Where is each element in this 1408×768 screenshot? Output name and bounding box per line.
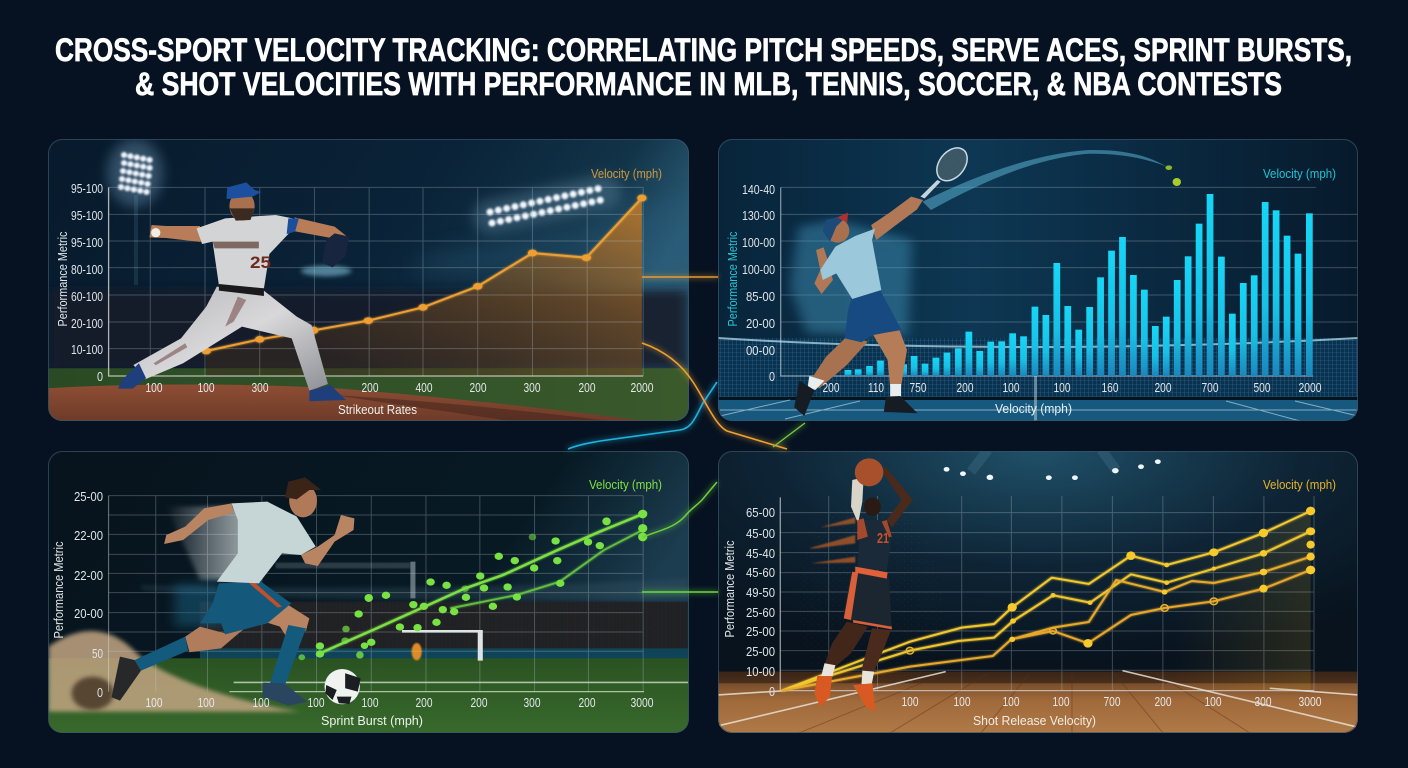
- x axis labels: 200: [1154, 380, 1172, 395]
- x axis labels: 100: [1052, 694, 1070, 709]
- panel: NBA shot release velocity: [718, 450, 1358, 735]
- x axis title: Shot Release Velocity): [973, 713, 1096, 728]
- x axis title: Sprint Burst (mph): [321, 713, 423, 728]
- y axis labels: 65-00: [746, 505, 775, 520]
- y axis title: Performance Metric: [51, 541, 66, 638]
- y axis labels: 25-60: [746, 605, 775, 620]
- x axis labels: [902, 697, 1322, 706]
- x axis labels: 100: [198, 380, 214, 395]
- arrow: green soccer-to-basketball link: [642, 591, 718, 593]
- y axis labels: 50: [92, 646, 103, 661]
- y axis title: Performance Metric: [55, 231, 70, 326]
- y axis labels: 20-00: [74, 606, 103, 621]
- panel border: NBA: [718, 452, 1358, 732]
- legend label: Velocity (mph): [589, 477, 662, 492]
- arrow: orange pitch-to-basketball link: [642, 343, 787, 449]
- panel: tennis serve velocity: [718, 139, 1358, 421]
- x axis labels: 100: [954, 694, 970, 709]
- x axis labels: 200: [578, 695, 596, 710]
- x axis labels: 100: [902, 694, 918, 709]
- jersey number: 21: [877, 530, 889, 547]
- y axis labels: [746, 505, 775, 699]
- y axis labels: 49-50: [746, 585, 775, 600]
- y axis labels: 95-100: [71, 235, 103, 250]
- y axis labels: 45-00: [746, 526, 775, 541]
- x axis labels: 300: [524, 380, 540, 395]
- x axis labels: 3000: [1298, 694, 1322, 709]
- y axis labels: 25-00: [74, 489, 103, 504]
- arena floor and lights: [718, 450, 1358, 735]
- x axis labels: 200: [470, 380, 486, 395]
- x axis labels: 3000: [630, 695, 654, 710]
- x axis labels: [146, 698, 654, 707]
- y axis labels: 130-00: [742, 208, 775, 223]
- scatter chart: sprint burst: [109, 496, 647, 692]
- y axis labels: 60-100: [71, 289, 103, 304]
- title: [55, 32, 1352, 102]
- x axis labels: 100: [1002, 694, 1020, 709]
- icon: floodlights: [107, 139, 606, 285]
- x axis labels: 700: [1202, 380, 1218, 395]
- x axis labels: 300: [1254, 694, 1272, 709]
- x axis labels: 750: [910, 380, 926, 395]
- y axis labels: 25-00: [746, 624, 775, 639]
- x axis labels: 200: [1154, 694, 1172, 709]
- y axis labels: 95-100: [71, 208, 103, 223]
- x axis labels: 500: [1254, 380, 1270, 395]
- y axis labels: 85-00: [746, 289, 775, 304]
- connector arrows between panels: [568, 277, 805, 592]
- x axis title: Strikeout Rates: [338, 402, 417, 417]
- x axis labels: 300: [524, 695, 540, 710]
- x axis labels: 100: [146, 695, 162, 710]
- x axis labels: 200: [470, 695, 488, 710]
- y axis labels: 0: [97, 685, 103, 700]
- illustration: basketball player shooting: [798, 458, 941, 713]
- x axis labels: [823, 383, 1322, 392]
- illustration: baseball pitcher: [118, 182, 349, 401]
- panel: soccer sprint bursts: [48, 451, 689, 735]
- y axis labels: 10-100: [71, 342, 103, 357]
- illustration: soccer player sprinting: [112, 477, 361, 706]
- y axis labels: 140-40: [742, 182, 775, 197]
- y axis labels: 20-00: [746, 316, 775, 331]
- legend label: Velocity (mph): [591, 166, 662, 181]
- y axis labels: 20-100: [71, 316, 103, 331]
- y axis labels: 22-00: [74, 568, 103, 583]
- y axis labels: 0: [97, 369, 103, 384]
- x axis labels: 100: [362, 695, 378, 710]
- arrow: orange pitch-to-tennis link: [642, 276, 718, 278]
- legend label: Velocity (mph): [1263, 477, 1336, 492]
- x axis labels: 200: [822, 380, 840, 395]
- multi-line chart: shot velocity: [780, 496, 1315, 691]
- legend label: Velocity (mph): [1263, 166, 1336, 181]
- x axis labels: 100: [198, 695, 214, 710]
- x axis labels: 200: [956, 380, 974, 395]
- arrow: blue tennis-to-soccer link: [568, 382, 717, 449]
- x axis labels: [146, 383, 654, 392]
- y axis labels: 80-100: [71, 262, 103, 277]
- x axis labels: 110: [868, 380, 884, 395]
- y axis labels: 100-00: [742, 235, 775, 250]
- stadium background: [48, 197, 697, 425]
- illustration: tennis player serving: [790, 144, 1181, 416]
- y axis title: Performance Metric: [725, 231, 740, 326]
- x axis labels: 200: [416, 695, 432, 710]
- y axis labels: 0: [769, 369, 775, 384]
- x axis labels: 100: [1002, 380, 1020, 395]
- tennis net and court: [718, 338, 1358, 421]
- x axis labels: 2000: [630, 380, 654, 395]
- y axis labels: 25-00: [746, 644, 775, 659]
- x axis labels: 100: [252, 695, 270, 710]
- jersey number: 25: [250, 253, 271, 272]
- y axis labels: [742, 182, 775, 384]
- panel border: MLB: [48, 140, 688, 420]
- y axis title: Performance Metric: [722, 540, 737, 638]
- x axis labels: 2000: [1298, 380, 1322, 395]
- stadium and pitch background: [48, 562, 688, 735]
- x axis labels: 100: [146, 380, 162, 395]
- y axis labels: [74, 489, 103, 700]
- panel: MLB pitch speed vs strikeout rates: [48, 139, 697, 425]
- area chart: velocity vs performance: [109, 187, 647, 376]
- arrow: green link top: [773, 423, 805, 447]
- y axis labels: 45-60: [746, 565, 775, 580]
- bar chart: serve aces by velocity: [781, 187, 1358, 376]
- y axis labels: 45-40: [746, 546, 775, 561]
- x axis labels: 300: [252, 380, 268, 395]
- x axis labels: 200: [578, 380, 596, 395]
- arrow: green soccer curve: [643, 482, 717, 537]
- x axis labels: 160: [1102, 380, 1118, 395]
- x axis labels: 100: [1054, 380, 1070, 395]
- y axis labels: 100-00: [742, 262, 775, 277]
- y axis labels: 10-00: [746, 664, 775, 679]
- x axis title: Velocity (mph): [995, 401, 1072, 416]
- x axis labels: 100: [1204, 694, 1222, 709]
- x axis labels: 200: [362, 380, 378, 395]
- y axis labels: 22-00: [74, 528, 103, 543]
- y axis labels: [71, 181, 103, 384]
- x axis labels: 100: [308, 695, 324, 710]
- panel border: tennis: [718, 140, 1358, 420]
- panel border: soccer: [48, 452, 688, 732]
- y axis labels: 0: [769, 684, 775, 699]
- y axis labels: 00-00: [746, 343, 775, 358]
- x axis labels: 700: [1104, 694, 1120, 709]
- x axis labels: 400: [416, 380, 432, 395]
- y axis labels: 95-100: [71, 181, 103, 196]
